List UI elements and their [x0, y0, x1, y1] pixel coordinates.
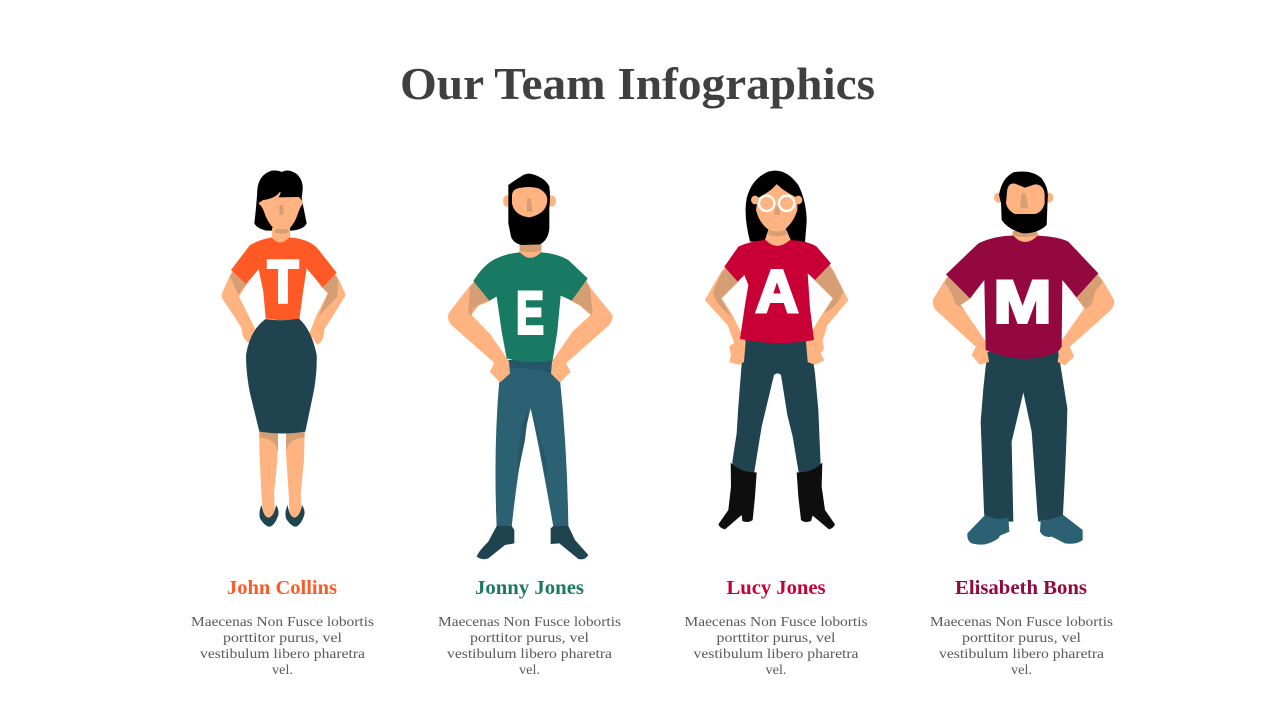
description: Maecenas Non Fusce lobortis — [191, 615, 374, 630]
title: Our Team Infographics — [400, 58, 875, 109]
upper body — [449, 174, 612, 382]
name: Lucy Jones — [726, 577, 826, 599]
description: vel. — [766, 663, 786, 678]
description: porttitor purus, vel — [962, 631, 1081, 646]
name: Jonny Jones — [475, 577, 584, 599]
figure: Jonny Jones, letter E — [449, 174, 612, 559]
description: vestibulum libero pharetra — [694, 647, 859, 662]
caption: Lucy Jones — [684, 577, 868, 678]
description: Maecenas Non Fusce lobortis — [684, 615, 868, 630]
caption: Elisabeth Bons — [930, 577, 1113, 678]
caption: John Collins — [191, 577, 374, 678]
description: porttitor purus, vel — [716, 631, 836, 646]
name: John Collins — [227, 577, 337, 599]
name: Elisabeth Bons — [955, 577, 1087, 599]
description: vestibulum libero pharetra — [939, 647, 1105, 662]
description: porttitor purus, vel — [470, 631, 589, 646]
trousers and shoes — [967, 352, 1083, 545]
description: Maecenas Non Fusce lobortis — [930, 615, 1113, 630]
upper body — [706, 185, 848, 364]
description: vel. — [519, 663, 540, 678]
figure: Lucy Jones, letter A — [706, 171, 848, 529]
description: porttitor purus, vel — [223, 631, 342, 646]
description — [191, 615, 374, 678]
description — [684, 615, 868, 678]
trousers and shoes — [477, 360, 588, 559]
legs and shoes — [259, 432, 305, 527]
hair back — [746, 171, 807, 242]
shirt letter: A — [756, 258, 798, 325]
shirt letter: E — [516, 280, 544, 346]
description — [438, 615, 621, 678]
figure: Elisabeth Bons, letter M — [933, 171, 1114, 545]
description: vel. — [272, 663, 293, 678]
shirt letter: T — [268, 248, 298, 316]
trousers and boots — [718, 340, 835, 529]
figure: John Collins, letter T — [222, 170, 345, 527]
description: vestibulum libero pharetra — [447, 647, 613, 662]
description: Maecenas Non Fusce lobortis — [438, 615, 621, 630]
upper body — [933, 171, 1114, 364]
description: vel. — [1011, 663, 1032, 678]
description: vestibulum libero pharetra — [200, 647, 366, 662]
description — [930, 615, 1113, 678]
shirt letter: M — [994, 268, 1052, 336]
caption: Jonny Jones — [438, 577, 621, 678]
upper body — [222, 170, 345, 433]
